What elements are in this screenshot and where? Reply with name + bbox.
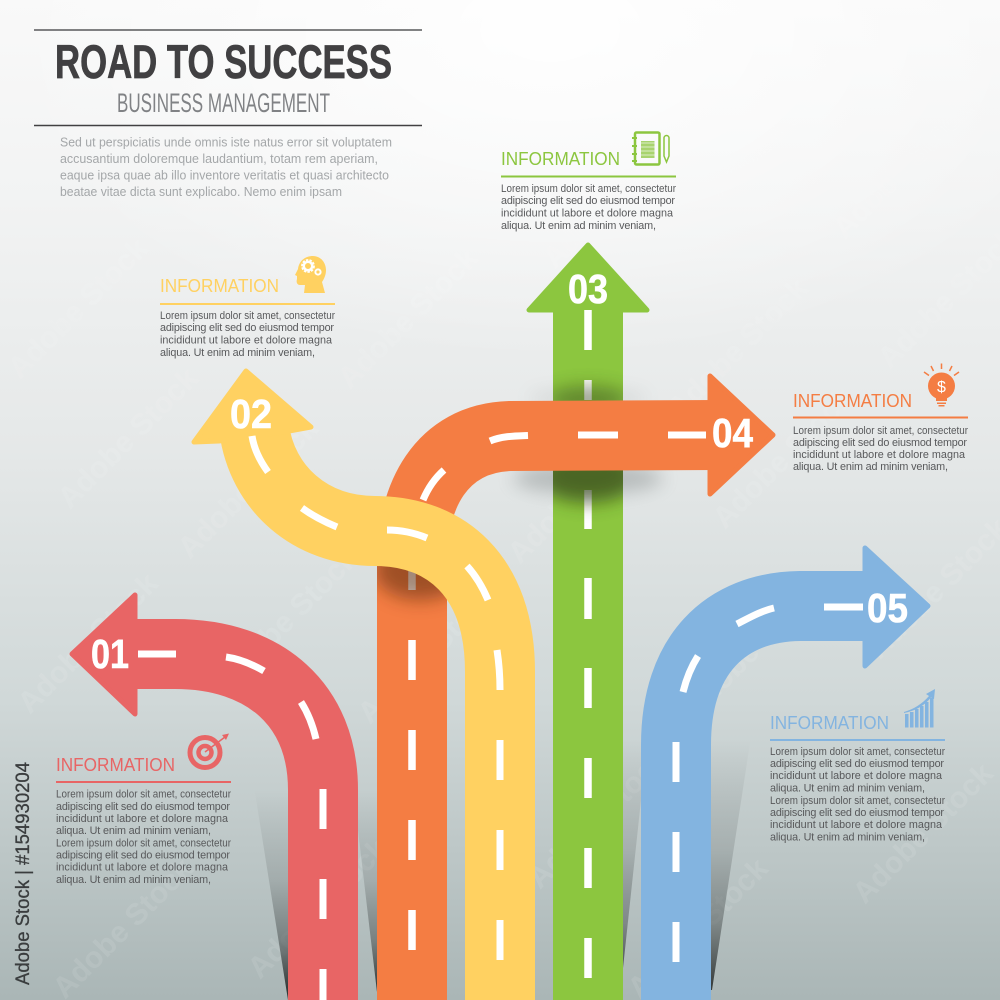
text block: adipiscing elit sed do eiusmod tempor (160, 322, 334, 334)
watermark pattern: Adobe Stock (172, 412, 325, 565)
heading: INFORMATION (770, 713, 889, 733)
watermark pattern: Adobe Stock (332, 242, 485, 395)
lane dashes (676, 607, 863, 962)
watermark pattern: Adobe Stock (522, 742, 675, 895)
watermark pattern: Adobe Stock (352, 577, 505, 730)
panel: information 04 orange (793, 364, 968, 473)
shadow cast on orange road by yellow road (377, 566, 447, 610)
watermark pattern: Adobe Stock (12, 567, 165, 720)
text block: Lorem ipsum dolor sit amet, consectetur (770, 795, 945, 807)
stock id vertical label: Adobe Stock | #154930204 (13, 762, 34, 985)
text block: Lorem ipsum dolor sit amet, consectetur (56, 788, 231, 800)
number 02: 02 (230, 391, 272, 437)
text block: aliqua. Ut enim ad minim veniam, (56, 874, 211, 886)
text block: Lorem ipsum dolor sit amet, consectetur (160, 310, 335, 322)
shadows beside the road bases (253, 730, 752, 1000)
text block: Lorem ipsum dolor sit amet, consectetur (793, 425, 968, 437)
panel: title block (34, 30, 422, 199)
lane dashes (252, 436, 500, 960)
text block: Lorem ipsum dolor sit amet, consectetur (770, 746, 945, 758)
text block: aliqua. Ut enim ad minim veniam, (770, 782, 925, 794)
panel: information 03 green (501, 132, 676, 232)
road 02: yellow arrow (194, 371, 500, 1000)
text block: Lorem ipsum dolor sit amet, consectetur (56, 838, 231, 850)
watermark pattern: Adobe Stock (502, 417, 655, 570)
lane dashes (408, 570, 416, 950)
road 04: orange arrow (412, 376, 773, 1000)
number 05: 05 (867, 585, 908, 631)
watermark pattern: Adobe Stock (52, 362, 205, 515)
text block: aliqua. Ut enim ad minim veniam, (793, 461, 948, 473)
watermark pattern: Adobe Stock (827, 92, 980, 245)
panel: information 02 yellow (160, 256, 335, 359)
icon: light bulb with dollar (924, 364, 959, 406)
text block: aliqua. Ut enim ad minim veniam, (56, 825, 211, 837)
text block: aliqua. Ut enim ad minim veniam, (160, 347, 315, 359)
intro paragraph: Sed ut perspiciatis unde omnis iste natus error sit voluptatem (60, 136, 392, 150)
intro paragraph: eaque ipsa quae ab illo inventore veritatis et quasi architecto (60, 168, 389, 182)
watermark pattern: Adobe Stock (707, 382, 860, 535)
watermark pattern: Adobe Stock (537, 122, 690, 275)
watermark pattern: Adobe Stock (677, 572, 830, 725)
road 05: blue arrow (676, 548, 928, 1000)
heading: INFORMATION (501, 149, 620, 169)
icon: rising bar chart (904, 689, 935, 728)
text block: incididunt ut labore et dolore magna (793, 449, 965, 461)
watermark pattern: Adobe Stock (662, 272, 815, 425)
text block: adipiscing elit sed do eiusmod tempor (501, 195, 675, 207)
text block: adipiscing elit sed do eiusmod tempor (770, 807, 944, 819)
text block: adipiscing elit sed do eiusmod tempor (770, 758, 944, 770)
number 01: 01 (91, 631, 129, 677)
text block: incididunt ut labore et dolore magna (501, 208, 673, 220)
text block: incididunt ut labore et dolore magna (770, 770, 942, 782)
text block: incididunt ut labore et dolore magna (770, 819, 942, 831)
text block: incididunt ut labore et dolore magna (56, 813, 228, 825)
intro paragraph: beatae vitae dicta sunt explicabo. Nemo enim ipsam (60, 185, 342, 199)
icon: head with gears (295, 256, 326, 293)
lane dashes (584, 310, 592, 978)
panel: information 01 red (56, 734, 231, 886)
number 03: 03 (568, 266, 608, 312)
heading: INFORMATION (56, 755, 175, 775)
watermark pattern: Adobe Stock (372, 42, 525, 195)
soft shadow around the crossing (513, 390, 663, 494)
text block: Lorem ipsum dolor sit amet, consectetur (501, 183, 676, 195)
road 03: green arrow (529, 245, 647, 1000)
text block: incididunt ut labore et dolore magna (160, 334, 332, 346)
watermark pattern: Adobe Stock (702, 52, 855, 205)
text block (501, 183, 676, 232)
heading: INFORMATION (160, 276, 279, 296)
text block (793, 425, 968, 473)
text block: adipiscing elit sed do eiusmod tempor (56, 850, 230, 862)
road 01: red arrow (72, 595, 323, 1000)
watermark pattern: Adobe Stock (242, 832, 395, 985)
subtitle: BUSINESS MANAGEMENT (117, 88, 330, 118)
intro paragraph: accusantium doloremque laudantium, totam rem aperiam, (60, 152, 378, 166)
text block (770, 746, 945, 844)
heading: INFORMATION (793, 391, 912, 411)
text block: adipiscing elit sed do eiusmod tempor (793, 437, 967, 449)
text block (56, 788, 231, 886)
panel: information 05 blue (770, 689, 945, 844)
shadow cast on green road (553, 376, 623, 516)
title: ROAD TO SUCCESS (55, 35, 392, 88)
intro paragraph (60, 136, 392, 199)
icon: notebook and pencil (632, 132, 669, 164)
text block: aliqua. Ut enim ad minim veniam, (501, 220, 656, 232)
icon: light bulb with dollar: $ (937, 379, 946, 396)
text block: adipiscing elit sed do eiusmod tempor (56, 801, 230, 813)
text block: aliqua. Ut enim ad minim veniam, (770, 832, 925, 844)
watermark pattern: Adobe Stock (212, 542, 365, 695)
text block: incididunt ut labore et dolore magna (56, 862, 228, 874)
watermark pattern: Adobe Stock (847, 757, 1000, 910)
lane dashes (138, 654, 323, 1000)
text block (160, 310, 335, 359)
watermark pattern: Adobe Stock (2, 232, 155, 385)
number 04: 04 (712, 410, 753, 456)
icon: target with arrow (190, 734, 229, 768)
